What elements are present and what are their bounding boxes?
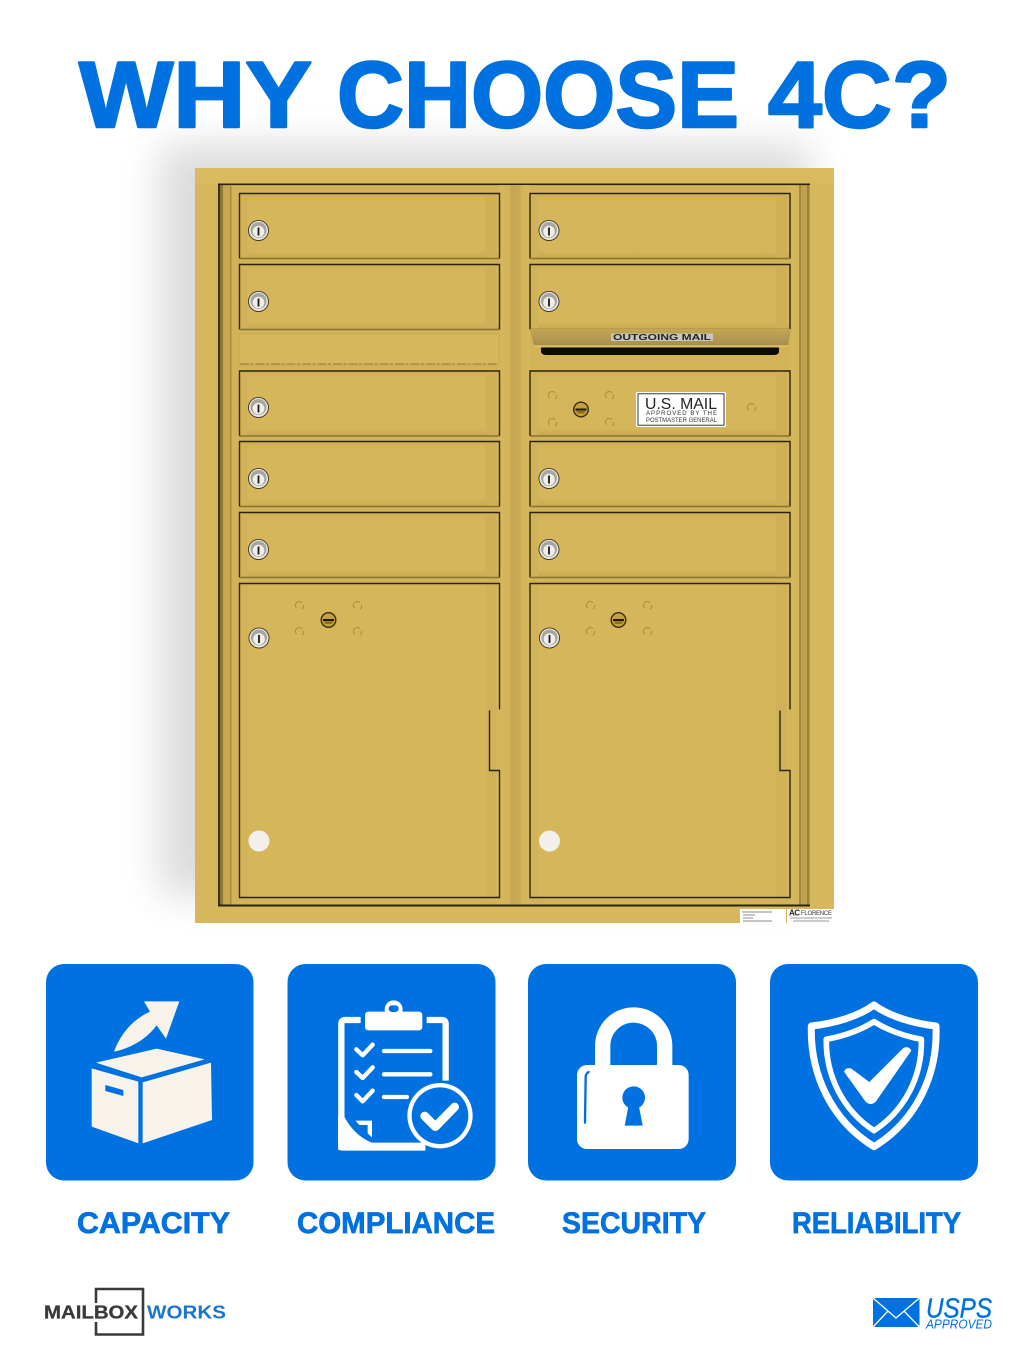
card background: [288, 964, 496, 1180]
title: 4C?: [768, 42, 951, 147]
logo: Mailbox Works: MAILBOX: [44, 1302, 138, 1322]
cam locks and rivets: [295, 391, 756, 635]
parcel door holes: [248, 830, 560, 852]
U.S. Mail plate: APPROVED BY THE: [646, 411, 717, 417]
panel: capacity: [46, 964, 254, 1180]
logo: USPS approved: USPS: [926, 1292, 992, 1324]
card background: [46, 964, 254, 1180]
title: [79, 42, 951, 147]
compliance stickers: FLORENCE: [801, 911, 832, 917]
panel: compliance: [288, 964, 496, 1180]
icon: envelope: [873, 1298, 920, 1327]
logo: USPS approved: APPROVED: [925, 1318, 992, 1332]
compliance stickers: AC: [789, 908, 800, 918]
blank divider panel: [239, 334, 499, 365]
title: CHOOSE: [337, 42, 739, 147]
U.S. Mail plate: POSTMASTER GENERAL: [646, 418, 718, 424]
outgoing mail flap: [530, 329, 791, 355]
card background: [770, 964, 978, 1180]
outgoing mail flap: OUTGOING MAIL: [613, 333, 711, 342]
mailbox drop shadow: [160, 145, 810, 895]
title: WHY: [79, 42, 312, 147]
panel: security: [528, 964, 736, 1180]
label: compliance: COMPLIANCE: [297, 1207, 495, 1240]
outer frame: [195, 168, 834, 923]
icon: padlock: [577, 1015, 689, 1149]
right column doors: [530, 194, 790, 898]
icon: clipboard checklist: [338, 1000, 473, 1151]
mailbox unit: [195, 168, 834, 923]
logo: USPS approved: [873, 1292, 992, 1332]
logo: Mailbox Works: [44, 1289, 226, 1334]
icon: shield with check: [811, 1005, 936, 1147]
U.S. Mail plate: [636, 392, 726, 427]
panel: reliability: [770, 964, 978, 1180]
centre post: [499, 185, 530, 904]
label: security: SECURITY: [562, 1207, 706, 1240]
logo: Mailbox Works: WORKS: [147, 1302, 226, 1322]
U.S. Mail plate: U.S. MAIL: [645, 396, 717, 413]
left column doors: [239, 194, 500, 898]
card background: [528, 964, 736, 1180]
compliance stickers: [740, 908, 834, 923]
label: capacity: CAPACITY: [77, 1207, 230, 1240]
icon: box with arrow: [92, 1001, 212, 1143]
door locks: [248, 220, 560, 648]
label: reliability: RELIABILITY: [792, 1207, 961, 1240]
